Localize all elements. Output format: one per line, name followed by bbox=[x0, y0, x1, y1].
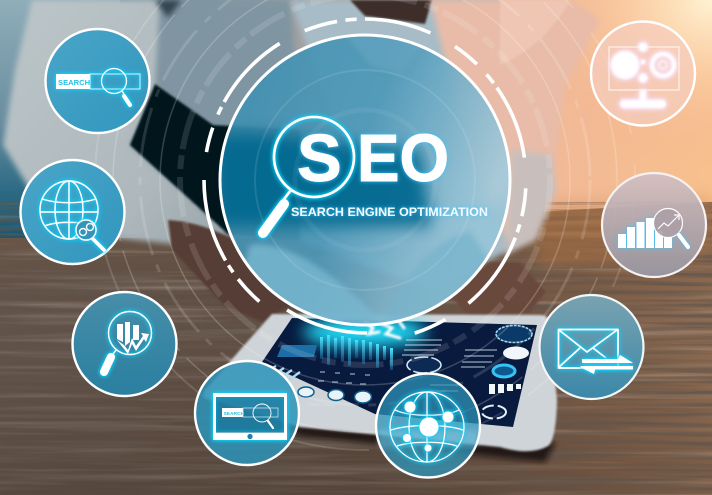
bubble: analysis magnifier bbox=[72, 292, 176, 396]
grey shirt front bbox=[155, 0, 300, 130]
SEO heading bbox=[297, 121, 449, 196]
bubble: email bbox=[540, 295, 644, 399]
tablet on desk bbox=[203, 314, 557, 462]
screen bar graph bbox=[320, 335, 393, 370]
search label: SEARCH bbox=[224, 411, 245, 417]
magnifier around S bbox=[263, 117, 354, 233]
screen ring gauge bbox=[493, 365, 515, 377]
white shirt sleeve, left bbox=[3, 0, 228, 248]
gears bbox=[611, 42, 648, 82]
band of glow bbox=[378, 430, 478, 447]
screen outline rows bbox=[318, 340, 497, 391]
bars and zigzag arrow bbox=[117, 322, 149, 354]
globe bbox=[40, 181, 98, 239]
search label: SEARCH bbox=[58, 78, 90, 87]
lens interior tones bbox=[215, 35, 515, 330]
peach right sleeve bbox=[430, 0, 600, 245]
hologram sparkle on tablet bbox=[365, 320, 404, 338]
central SEO lens bbox=[204, 19, 526, 341]
screen slanted stripes bbox=[254, 366, 300, 388]
screen ring bottom bbox=[482, 406, 506, 418]
right gear bbox=[652, 54, 674, 76]
bubble: search bar bbox=[46, 29, 150, 133]
network nodes bbox=[403, 402, 454, 452]
bubble: globe search bbox=[20, 160, 124, 264]
screen dial centre bbox=[407, 357, 441, 373]
reply arrows bbox=[580, 355, 633, 374]
left hand bbox=[168, 220, 300, 322]
subtitle: SEARCH ENGINE OPTIMIZATION bbox=[291, 205, 488, 219]
SEO heading: S bbox=[297, 121, 342, 196]
tablet shadow bbox=[280, 424, 556, 462]
tablet home button bbox=[247, 434, 253, 439]
screen caption: Quality Control bbox=[308, 401, 335, 408]
screen pie chart bbox=[503, 346, 529, 360]
magnifier frame bbox=[104, 312, 152, 372]
search field bbox=[222, 408, 243, 417]
tablet screen band bbox=[216, 397, 284, 433]
magnifier bbox=[253, 404, 273, 428]
magnifier with trend line bbox=[654, 208, 688, 247]
magnifier bbox=[102, 68, 130, 105]
wooden desk bbox=[0, 198, 712, 495]
faint HUD rings bbox=[95, 0, 635, 450]
bubble: network globe bbox=[376, 374, 480, 478]
small magnifier bbox=[76, 220, 104, 250]
screen mini bars bbox=[489, 384, 521, 394]
bubble: bar chart analytics bbox=[602, 173, 706, 277]
bars bbox=[618, 218, 672, 248]
envelope bbox=[558, 330, 618, 368]
right hand bbox=[450, 262, 546, 318]
monitor outline bbox=[609, 47, 679, 90]
SEO heading: EO bbox=[357, 121, 449, 196]
dashed outer ring bbox=[204, 19, 526, 341]
lens disc bbox=[220, 35, 510, 325]
upper backdrop bbox=[0, 0, 712, 260]
bubble: gears on monitor bbox=[591, 22, 695, 126]
bottom ring arc bbox=[287, 310, 367, 333]
monitor stand bbox=[620, 90, 666, 108]
bubble: tablet search bbox=[195, 361, 299, 465]
screen radial dial top right bbox=[496, 326, 532, 342]
light shirt centre bbox=[290, 0, 515, 290]
sunlit corner bbox=[430, 0, 712, 240]
lens rim bbox=[220, 35, 510, 325]
tablet screen bbox=[262, 318, 537, 427]
dark vest bbox=[130, 84, 300, 240]
search field outline bbox=[243, 408, 278, 417]
screen dials row bbox=[298, 387, 372, 403]
grey cuff at right bbox=[505, 150, 556, 255]
tablet body bbox=[203, 314, 557, 451]
left blue wall bbox=[0, 0, 120, 240]
globe lines bbox=[390, 392, 464, 462]
screen glow bbox=[303, 317, 427, 347]
search box bbox=[56, 74, 140, 89]
tablet outline bbox=[213, 393, 287, 440]
dark collar patch bbox=[155, 0, 182, 18]
chin shadow at collar bbox=[350, 0, 432, 24]
screen blue panel bbox=[277, 345, 317, 357]
